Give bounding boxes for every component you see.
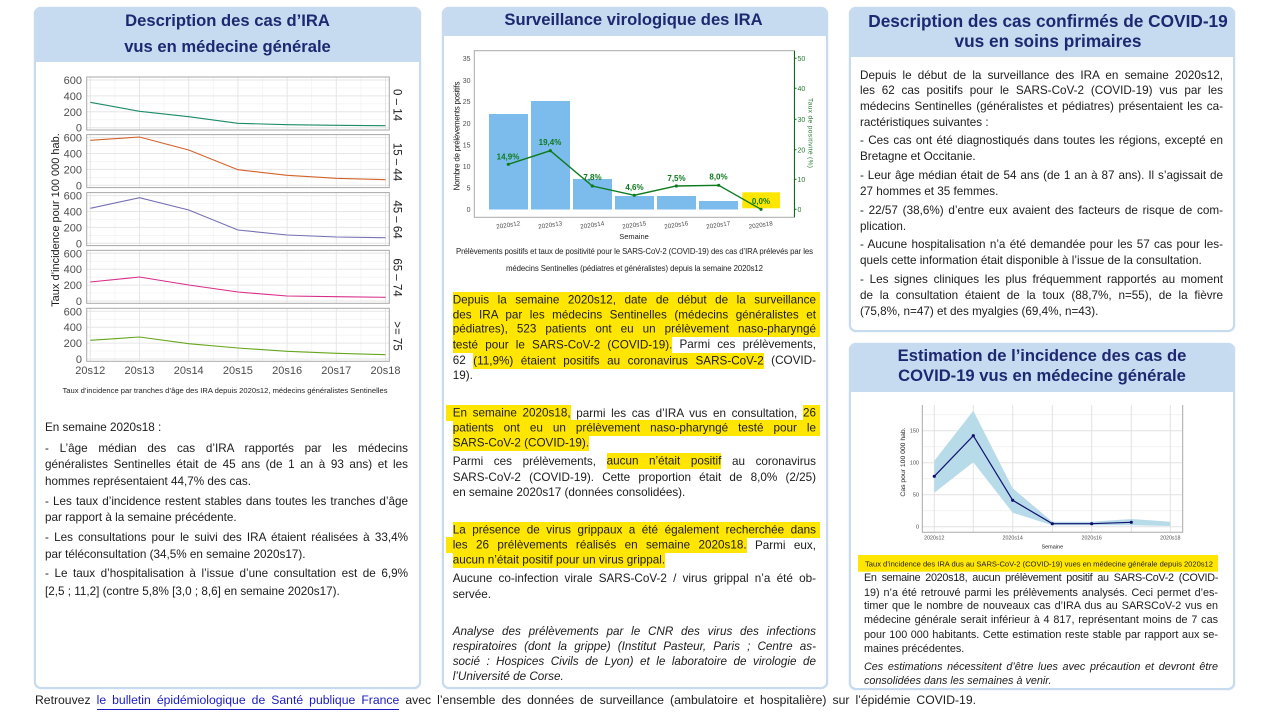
- footer: lien vers le bulletin: Retrouvez le bulletin épidémiologique de Santé publique France avec l’ensemble des données de surveillance (ambulatoire et hospitalière) sur l’épidémie COVID-19.: [35, 693, 976, 707]
- heading: estimation de l'incidence: Estimation de l’incidence des cas de: [898, 346, 1186, 365]
- text block: semaine 2020s18: - L’âge médian des cas d’IRA rapportés par les médecins: [45, 442, 408, 455]
- text block: prélèvements semaine 2020s18: En semaine 2020s18, parmi les cas d’IRA vus en consultation, 26: [453, 406, 816, 420]
- x axis labels: 2020s16: [1082, 536, 1102, 542]
- text block: cas confirmés: ractéristiques suivantes :: [860, 116, 989, 129]
- text block: estimation: En semaine 2020s18, aucun prélèvement positif au SARS-CoV-2 (COVID-: [864, 572, 1218, 584]
- left axis title: Nombre de prélèvements positifs: [452, 82, 462, 190]
- right axis title: Taux de positivité (%): [806, 98, 814, 168]
- text block: semaine 2020s18: [45, 421, 408, 598]
- heading: estimation de l'incidence: COVID-19 vus en médecine générale: [898, 366, 1186, 385]
- value labels: 7,5%: [667, 174, 686, 183]
- text block: virus grippaux: Aucune co-infection virale SARS-CoV-2 / virus grippal n’a été ob-: [453, 572, 816, 584]
- chart: incidence par tranches d'âge: [50, 76, 402, 375]
- positivity line: [507, 149, 763, 211]
- left axis: [463, 56, 471, 214]
- left axis: 0: [467, 207, 471, 214]
- heading: description des cas confirmés: vus en soins primaires: [955, 31, 1141, 51]
- right axis: 50: [798, 56, 805, 63]
- text block: prélèvements semaine 2020s18: [446, 405, 820, 498]
- x axis labels: 2020s12: [924, 536, 945, 542]
- value labels: 7,8%: [583, 173, 602, 182]
- x axis labels: [496, 220, 774, 231]
- facet: 0-14: 0 – 14: [390, 89, 402, 122]
- text block: virus grippaux: [446, 522, 820, 600]
- caption: prélèvements positifs: médecins Sentinelles (pédiatres et généralistes) depuis la semaine 2020s12: [506, 264, 763, 273]
- facet: 0-14: [64, 75, 402, 135]
- right axis: [794, 51, 805, 217]
- heading: description des cas d'IRA: Description des cas d’IRA: [125, 11, 330, 30]
- heading: surveillance virologique: Surveillance virologique des IRA: [504, 10, 763, 29]
- y axis labels: 100: [910, 461, 919, 467]
- value labels: [497, 138, 770, 206]
- panel: description des cas d'IRA: [34, 7, 421, 689]
- chart: estimation de l'incidence: [900, 405, 1184, 550]
- text block: semaine 2020s18: généralistes Sentinelles était de 45 ans (de 1 an à 93 ans) et les: [45, 458, 408, 471]
- facet: 65-74: [64, 248, 402, 308]
- text block: semaine 2020s18: - Les taux d’incidence restent stables dans toutes les tranches d’âge: [45, 495, 408, 508]
- x axis labels: 2020s13: [538, 220, 563, 231]
- text block: prélèvements semaine 2020s18: SARS-CoV-2 (COVID-19).: [453, 436, 589, 450]
- panel: surveillance virologique: [442, 7, 828, 689]
- text block: cas confirmés: - Leur âge médian était de 54 ans (de 1 an à 87 ans). Il s’agissait de: [860, 169, 1223, 182]
- panel: description des cas confirmés: [849, 7, 1235, 332]
- text block: prélèvements depuis 2020s12: pédiatres), 523 patients ont eu un prélèvement naso-pharyngé: [453, 322, 816, 335]
- text block: prélèvements depuis 2020s12: 19).: [453, 369, 473, 382]
- highlight 2020s18: [742, 192, 780, 208]
- text block: cas confirmés: (75,8%, n=47) et des myalgies (69,4%, n=43).: [860, 305, 1098, 318]
- text block: cas confirmés: médecins Sentinelles (généralistes et pédiatres) présentaient les ca-: [860, 100, 1223, 113]
- text block: semaine 2020s18: - Les consultations pour le suivi des IRA étaient réalisées à 33,4%: [45, 531, 408, 544]
- facet: 65-74: 65 – 74: [390, 258, 402, 297]
- y axis title: Taux d’incidence pour 100 000 hab.: [50, 133, 62, 307]
- text block: analyse CNR: l’Université de Corse.: [453, 670, 564, 683]
- facet: 45-64: [64, 191, 402, 250]
- incidence line: [933, 434, 1133, 525]
- caption: prélèvements positifs: [456, 247, 813, 273]
- heading: description des cas confirmés: Description des cas confirmés de COVID-19: [868, 11, 1228, 31]
- text block: estimation: consolidées dans les semaines à venir.: [864, 675, 1051, 687]
- x axis labels: 2020s17: [706, 220, 731, 231]
- text block: estimation: pour 100 000 habitants. Cette estimation reste stable par rapport aux se-: [864, 629, 1218, 641]
- bars: [489, 101, 738, 210]
- x axis labels: 2020s16: [664, 220, 689, 231]
- left axis: 25: [463, 99, 471, 106]
- text block: cas confirmés: quels cette information était disponible à l’issue de la consultation.: [860, 254, 1202, 267]
- heading: surveillance virologique: [442, 7, 828, 36]
- y axis title: Cas pour 100 000 hab.: [900, 427, 907, 497]
- text block: prélèvements semaine 2020s18: Parmi ces prélèvements, aucun n’était positif au coronavirus: [453, 454, 816, 468]
- caption: taux d'incidence dus au SARS-CoV-2: [858, 555, 1218, 572]
- chart: prélèvements positifs et taux de positivité: [452, 50, 814, 241]
- y axis labels: 150: [910, 429, 919, 435]
- x axis labels: 2020s18: [1160, 536, 1181, 542]
- text block: semaine 2020s18: hommes représentaient 44,7% des cas.: [45, 475, 251, 488]
- facet: 15-44: 15 – 44: [390, 143, 402, 182]
- caption: taux d'incidence dus au SARS-CoV-2: Taux d’incidence des IRA dus au SARS-CoV-2 (COVID-19) vues en médecine générale depuis 2020s12: [865, 559, 1213, 568]
- text block: cas confirmés: Depuis le début de la surveillance des IRA en semaine 2020s12,: [860, 69, 1223, 82]
- x axis title: Semaine: [619, 232, 649, 241]
- left axis: 10: [463, 164, 471, 171]
- facet: 45-64: 45 – 64: [390, 200, 402, 239]
- text block: virus grippaux: La présence de virus grippaux a été également recherchée dans: [453, 524, 816, 536]
- text block: prélèvements depuis 2020s12: Depuis la semaine 2020s12, date de début de la surveillance: [453, 293, 816, 306]
- text block: cas confirmés: - 22/57 (38,6%) d’entre eux avaient des facteurs de risque de com-: [860, 204, 1223, 217]
- right axis: 30: [798, 117, 805, 124]
- text block: estimation: maines précédentes.: [864, 643, 964, 655]
- text block: cas confirmés: Bretagne et Occitanie.: [860, 150, 976, 163]
- text block: semaine 2020s18: par téléconsultation (34,5% en semaine 2020s17).: [45, 548, 306, 561]
- text block: analyse CNR: [452, 625, 816, 683]
- right axis: 10: [798, 177, 805, 184]
- text block: prélèvements depuis 2020s12: des IRA par les médecins Sentinelles (médecins généralistes et: [453, 308, 816, 321]
- text block: cas confirmés: [860, 69, 1223, 318]
- text block: estimation: 19) n’a été retrouvé parmi les prélèvements analysés. Ceci permet d’es-: [864, 587, 1218, 599]
- text block: semaine 2020s18: par rapport à la semaine précédente.: [45, 511, 237, 524]
- text block: estimation: Ces estimations nécessitent d’être lues avec précaution et devront être: [864, 661, 1218, 673]
- left axis: 20: [463, 121, 471, 128]
- value labels: 14,9%: [497, 152, 519, 162]
- heading: description des cas d'IRA: [34, 7, 421, 62]
- text block: semaine 2020s18: [2,5 ; 11,2] (contre 5,8% [3,0 ; 8,6] en semaine 2020s17).: [45, 585, 340, 598]
- text block: estimation: timer que le nombre de nouveaux cas d’IRA dus au SARSCoV-2 vus en: [864, 600, 1218, 612]
- text block: estimation: [864, 572, 1218, 687]
- right axis: 0: [798, 207, 802, 214]
- caption: prélèvements positifs: Prélèvements positifs et taux de positivité pour le SARS-CoV-2 (COVID-19) des cas d’IRA prélevés par les: [456, 247, 813, 256]
- text block: prélèvements semaine 2020s18: patients ont eu un prélèvement naso-pharyngé testé pour le: [453, 422, 816, 434]
- text block: virus grippaux: aucun n’était positif pour un virus grippal.: [453, 554, 665, 566]
- right axis: 20: [798, 148, 805, 154]
- facet: >=75: [64, 306, 402, 366]
- text block: cas confirmés: - Les signes cliniques les plus fréquemment rapportés au moment: [860, 273, 1223, 286]
- text block: cas confirmés: de la consultation étaient de la toux (88,7%, n=55), de la fièvre: [860, 289, 1223, 302]
- facet: 15-44: [64, 133, 402, 192]
- text block: cas confirmés: 27 hommes et 35 femmes.: [860, 185, 998, 198]
- text block: virus grippaux: les 26 prélèvements réalisés en semaine 2020s18. Parmi eux,: [453, 538, 816, 552]
- text block: semaine 2020s18: - Le taux d’hospitalisation à l’issue d’une consultation est de 6,9%: [45, 567, 408, 580]
- y axis labels: [910, 429, 919, 531]
- text block: estimation: médecine générale serait inférieur à 4 817, représentant moins de 7 cas: [864, 614, 1218, 626]
- text block: semaine 2020s18: En semaine 2020s18 :: [45, 421, 161, 434]
- text block: cas confirmés: les 62 cas positifs pour le SARS-CoV-2 (COVID-19) vus par les: [860, 84, 1223, 97]
- y axis labels: 50: [913, 493, 919, 499]
- text block: cas confirmés: - Ces cas ont été diagnostiqués dans toutes les régions, excepté en: [860, 134, 1223, 147]
- value labels: 0,0%: [752, 197, 770, 206]
- right axis: 40: [798, 86, 805, 93]
- x axis labels: [75, 365, 400, 377]
- text block: prélèvements depuis 2020s12: [452, 292, 820, 382]
- text block: analyse CNR: respiratoires (dont la grippe) (Institut Pasteur, Paris ; Centre as-: [453, 640, 816, 653]
- value labels: 4,6%: [625, 183, 644, 192]
- left axis: 30: [463, 78, 471, 85]
- text block: analyse CNR: socié : Hospices Civils de Lyon) et le laboratoire de virologie de: [453, 655, 816, 668]
- value labels: 19,4%: [539, 138, 561, 147]
- left axis: 15: [463, 142, 471, 150]
- heading: description des cas confirmés: [849, 7, 1235, 57]
- text block: virus grippaux: servée.: [453, 588, 491, 600]
- x axis labels: 2020s12: [496, 220, 521, 231]
- value labels: 8,0%: [709, 172, 728, 182]
- y axis labels: 0: [916, 525, 919, 531]
- confidence band: [934, 411, 1170, 526]
- heading: estimation de l'incidence: [849, 343, 1235, 392]
- heading: description des cas d'IRA: vus en médecine générale: [124, 37, 331, 56]
- text block: analyse CNR: Analyse des prélèvements par le CNR des virus des infections: [453, 625, 816, 638]
- x axis title: Semaine: [1041, 544, 1063, 550]
- x axis labels: 2020s15: [622, 220, 647, 231]
- text block: prélèvements depuis 2020s12: testé pour le SARS-CoV-2 (COVID-19). Parmi ces prélèvements,: [453, 338, 816, 351]
- text block: cas confirmés: - Aucune hospitalisation n’a été demandée pour les 57 cas pour les-: [860, 238, 1223, 251]
- text block: prélèvements semaine 2020s18: en semaine 2020s17 (données consolidées).: [453, 486, 685, 498]
- x axis labels: [924, 536, 1181, 542]
- text block: prélèvements semaine 2020s18: SARS-CoV-2 (COVID-19). Cette proportion était de 8,0% (2/25): [453, 470, 816, 484]
- left axis: 5: [467, 186, 471, 192]
- caption: incidence par tranches d'âge: Taux d’incidence par tranches d’âge des IRA depuis 2020s12, médecins généralistes Sentinelles: [62, 386, 388, 395]
- text block: prélèvements depuis 2020s12: 62 (11,9%) étaient positifs au coronavirus SARS-CoV-2 (COVID-: [453, 354, 816, 367]
- x axis labels: 2020s18: [748, 220, 774, 231]
- left axis: 35: [463, 56, 471, 63]
- text block: cas confirmés: plication.: [860, 220, 906, 233]
- panel: estimation de l'incidence: [849, 343, 1235, 690]
- x axis labels: 2020s14: [1003, 536, 1023, 542]
- x axis labels: 2020s14: [580, 220, 605, 231]
- facet: >=75: >= 75: [390, 321, 402, 351]
